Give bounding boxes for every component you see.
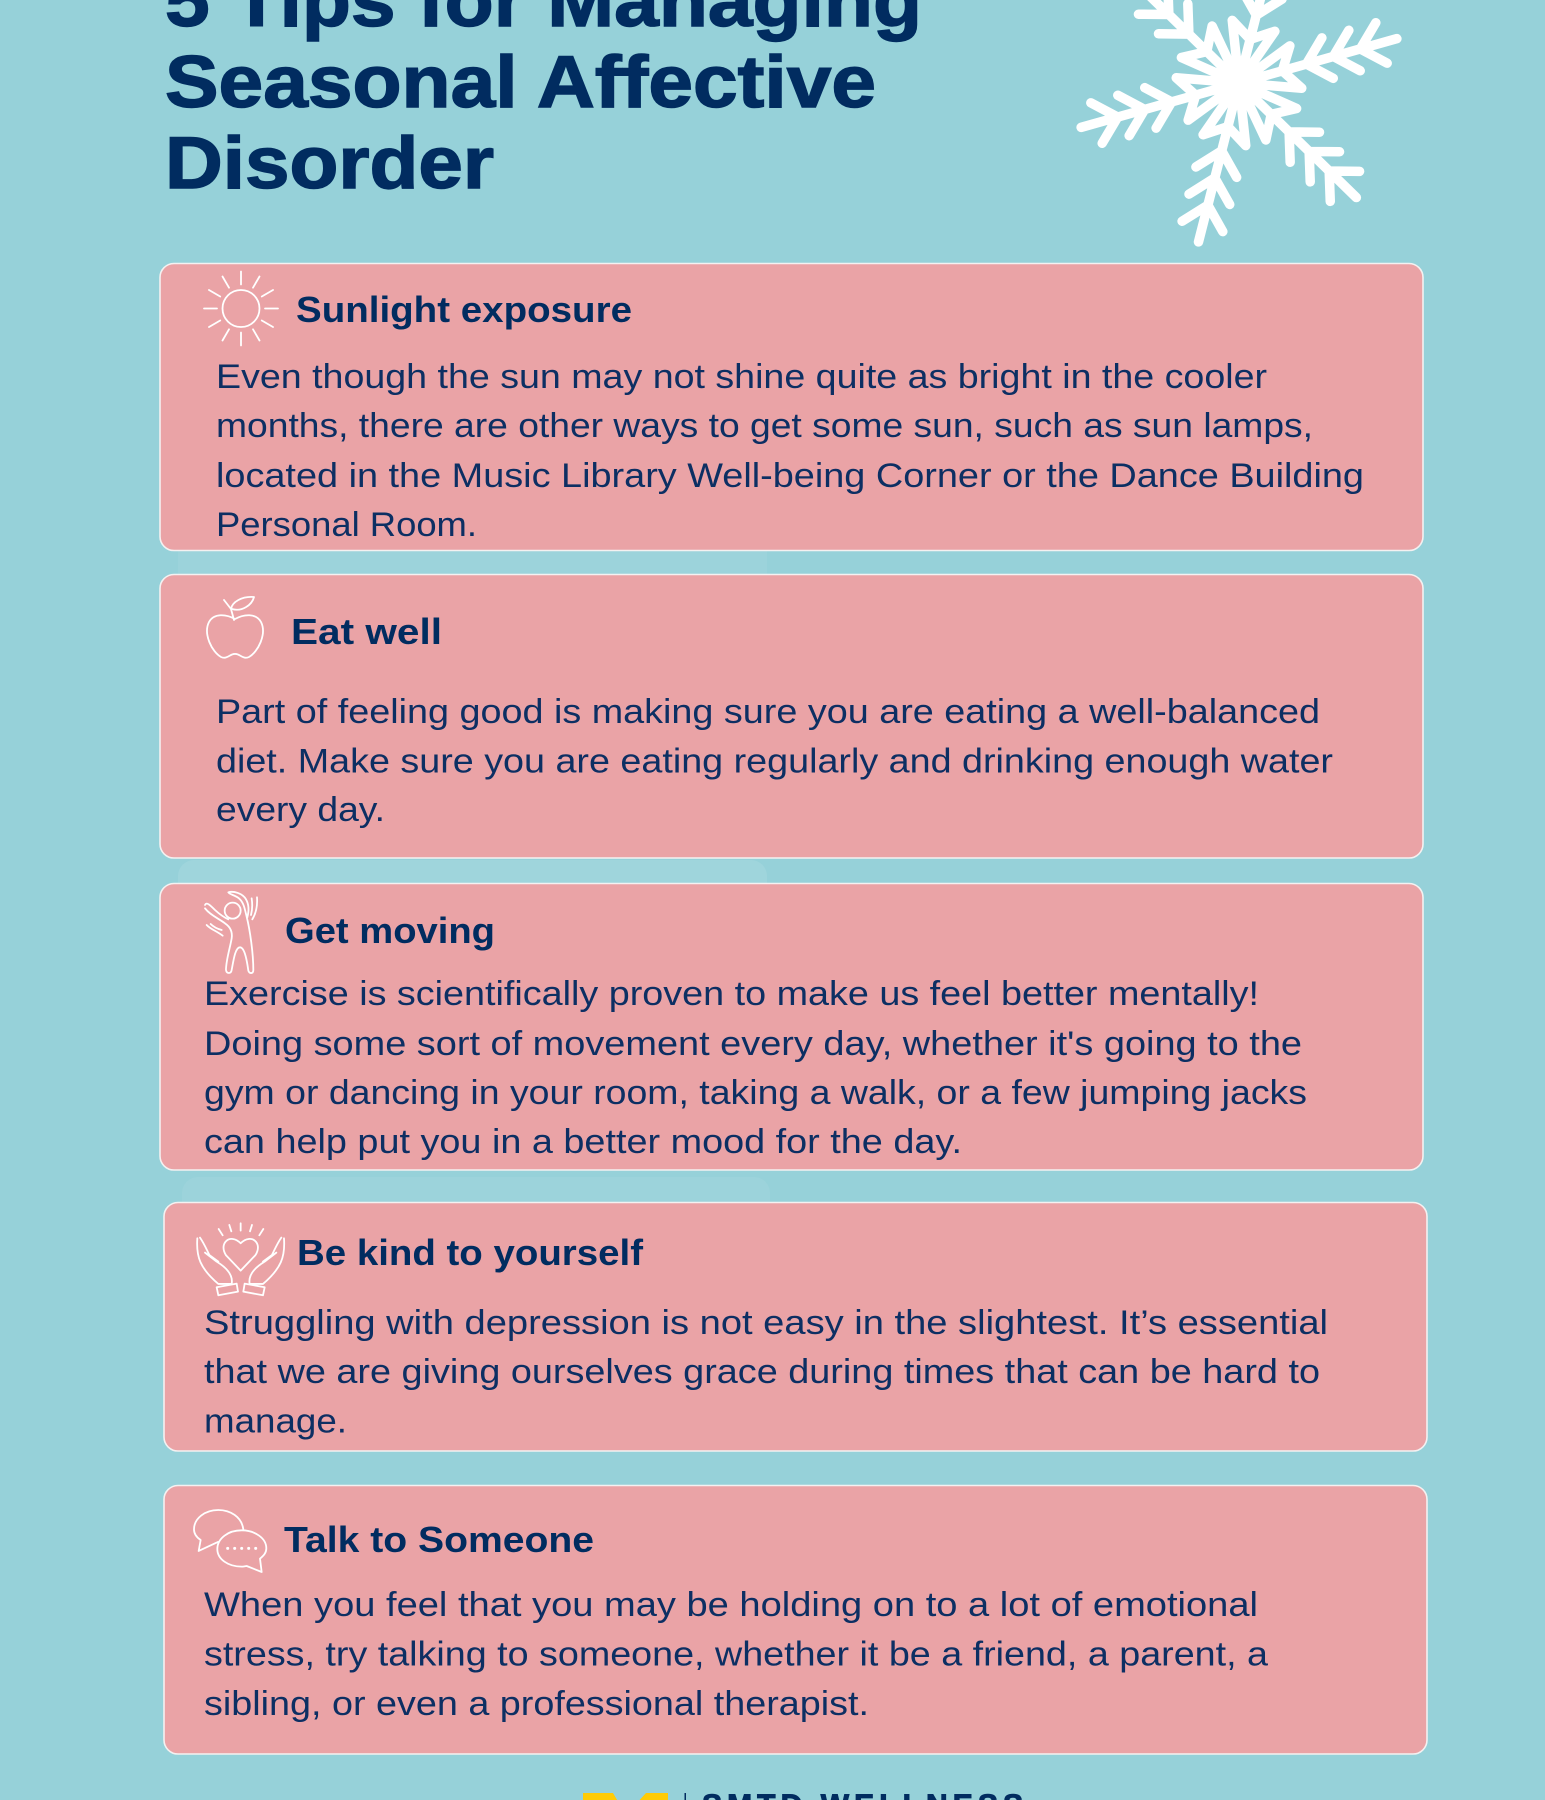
body text: diet. Make sure you are eating regularly and drinking enough water (216, 742, 1333, 780)
body text (204, 1304, 1328, 1440)
panel: be kind to yourself (164, 1202, 1427, 1451)
heading: Sunlight exposure (296, 289, 632, 330)
body text (216, 358, 1364, 544)
panel: sunlight exposure (160, 264, 1423, 550)
body text (216, 693, 1333, 829)
heading: Eat well (291, 611, 442, 652)
body text: Exercise is scientifically proven to make us feel better mentally! (204, 975, 1259, 1013)
body text: Doing some sort of movement every day, whether it's going to the (204, 1025, 1302, 1063)
heading: Talk to Someone (284, 1519, 594, 1560)
icon: hands holding heart (197, 1223, 284, 1295)
body text: Even though the sun may not shine quite as bright in the cooler (216, 358, 1267, 396)
body text (204, 975, 1307, 1161)
body text: Part of feeling good is making sure you are eating a well-balanced (216, 693, 1320, 731)
body text: gym or dancing in your room, taking a walk, or a few jumping jacks (204, 1074, 1307, 1112)
body text: Struggling with depression is not easy in the slightest. It’s essential (204, 1304, 1328, 1342)
card background (164, 1202, 1427, 1451)
title (165, 0, 922, 204)
body text: every day. (216, 791, 385, 829)
title: Disorder (165, 123, 494, 204)
icon: sun (204, 272, 278, 346)
card background (164, 1486, 1427, 1754)
icon: apple (207, 597, 263, 658)
icon: chat bubbles (194, 1510, 266, 1572)
card background (160, 264, 1423, 550)
body text: located in the Music Library Well-being Corner or the Dance Building (216, 457, 1364, 495)
icon: dancer (205, 892, 257, 973)
heading: Be kind to yourself (297, 1232, 644, 1273)
body text (204, 1586, 1268, 1723)
panel: eat well (160, 574, 1423, 858)
body text: manage. (204, 1402, 347, 1440)
body text: that we are giving ourselves grace during times that can be hard to (204, 1353, 1320, 1391)
icon: yellow M mark (583, 1793, 668, 1800)
body text: When you feel that you may be holding on to a lot of emotional (204, 1586, 1258, 1624)
icon: snowflake (1075, 0, 1403, 247)
body text: Personal Room. (216, 506, 477, 544)
body text: can help put you in a better mood for the day. (204, 1123, 962, 1161)
body text: stress, try talking to someone, whether it be a friend, a parent, a (204, 1636, 1268, 1674)
title: Seasonal Affective (165, 42, 876, 123)
panel: get moving (160, 884, 1423, 1170)
body text: months, there are other ways to get some sun, such as sun lamps, (216, 407, 1313, 445)
heading: Get moving (285, 910, 495, 951)
card background (160, 884, 1423, 1170)
body text: sibling, or even a professional therapist. (204, 1685, 869, 1723)
card background (160, 574, 1423, 858)
panel: talk to someone (164, 1486, 1427, 1754)
